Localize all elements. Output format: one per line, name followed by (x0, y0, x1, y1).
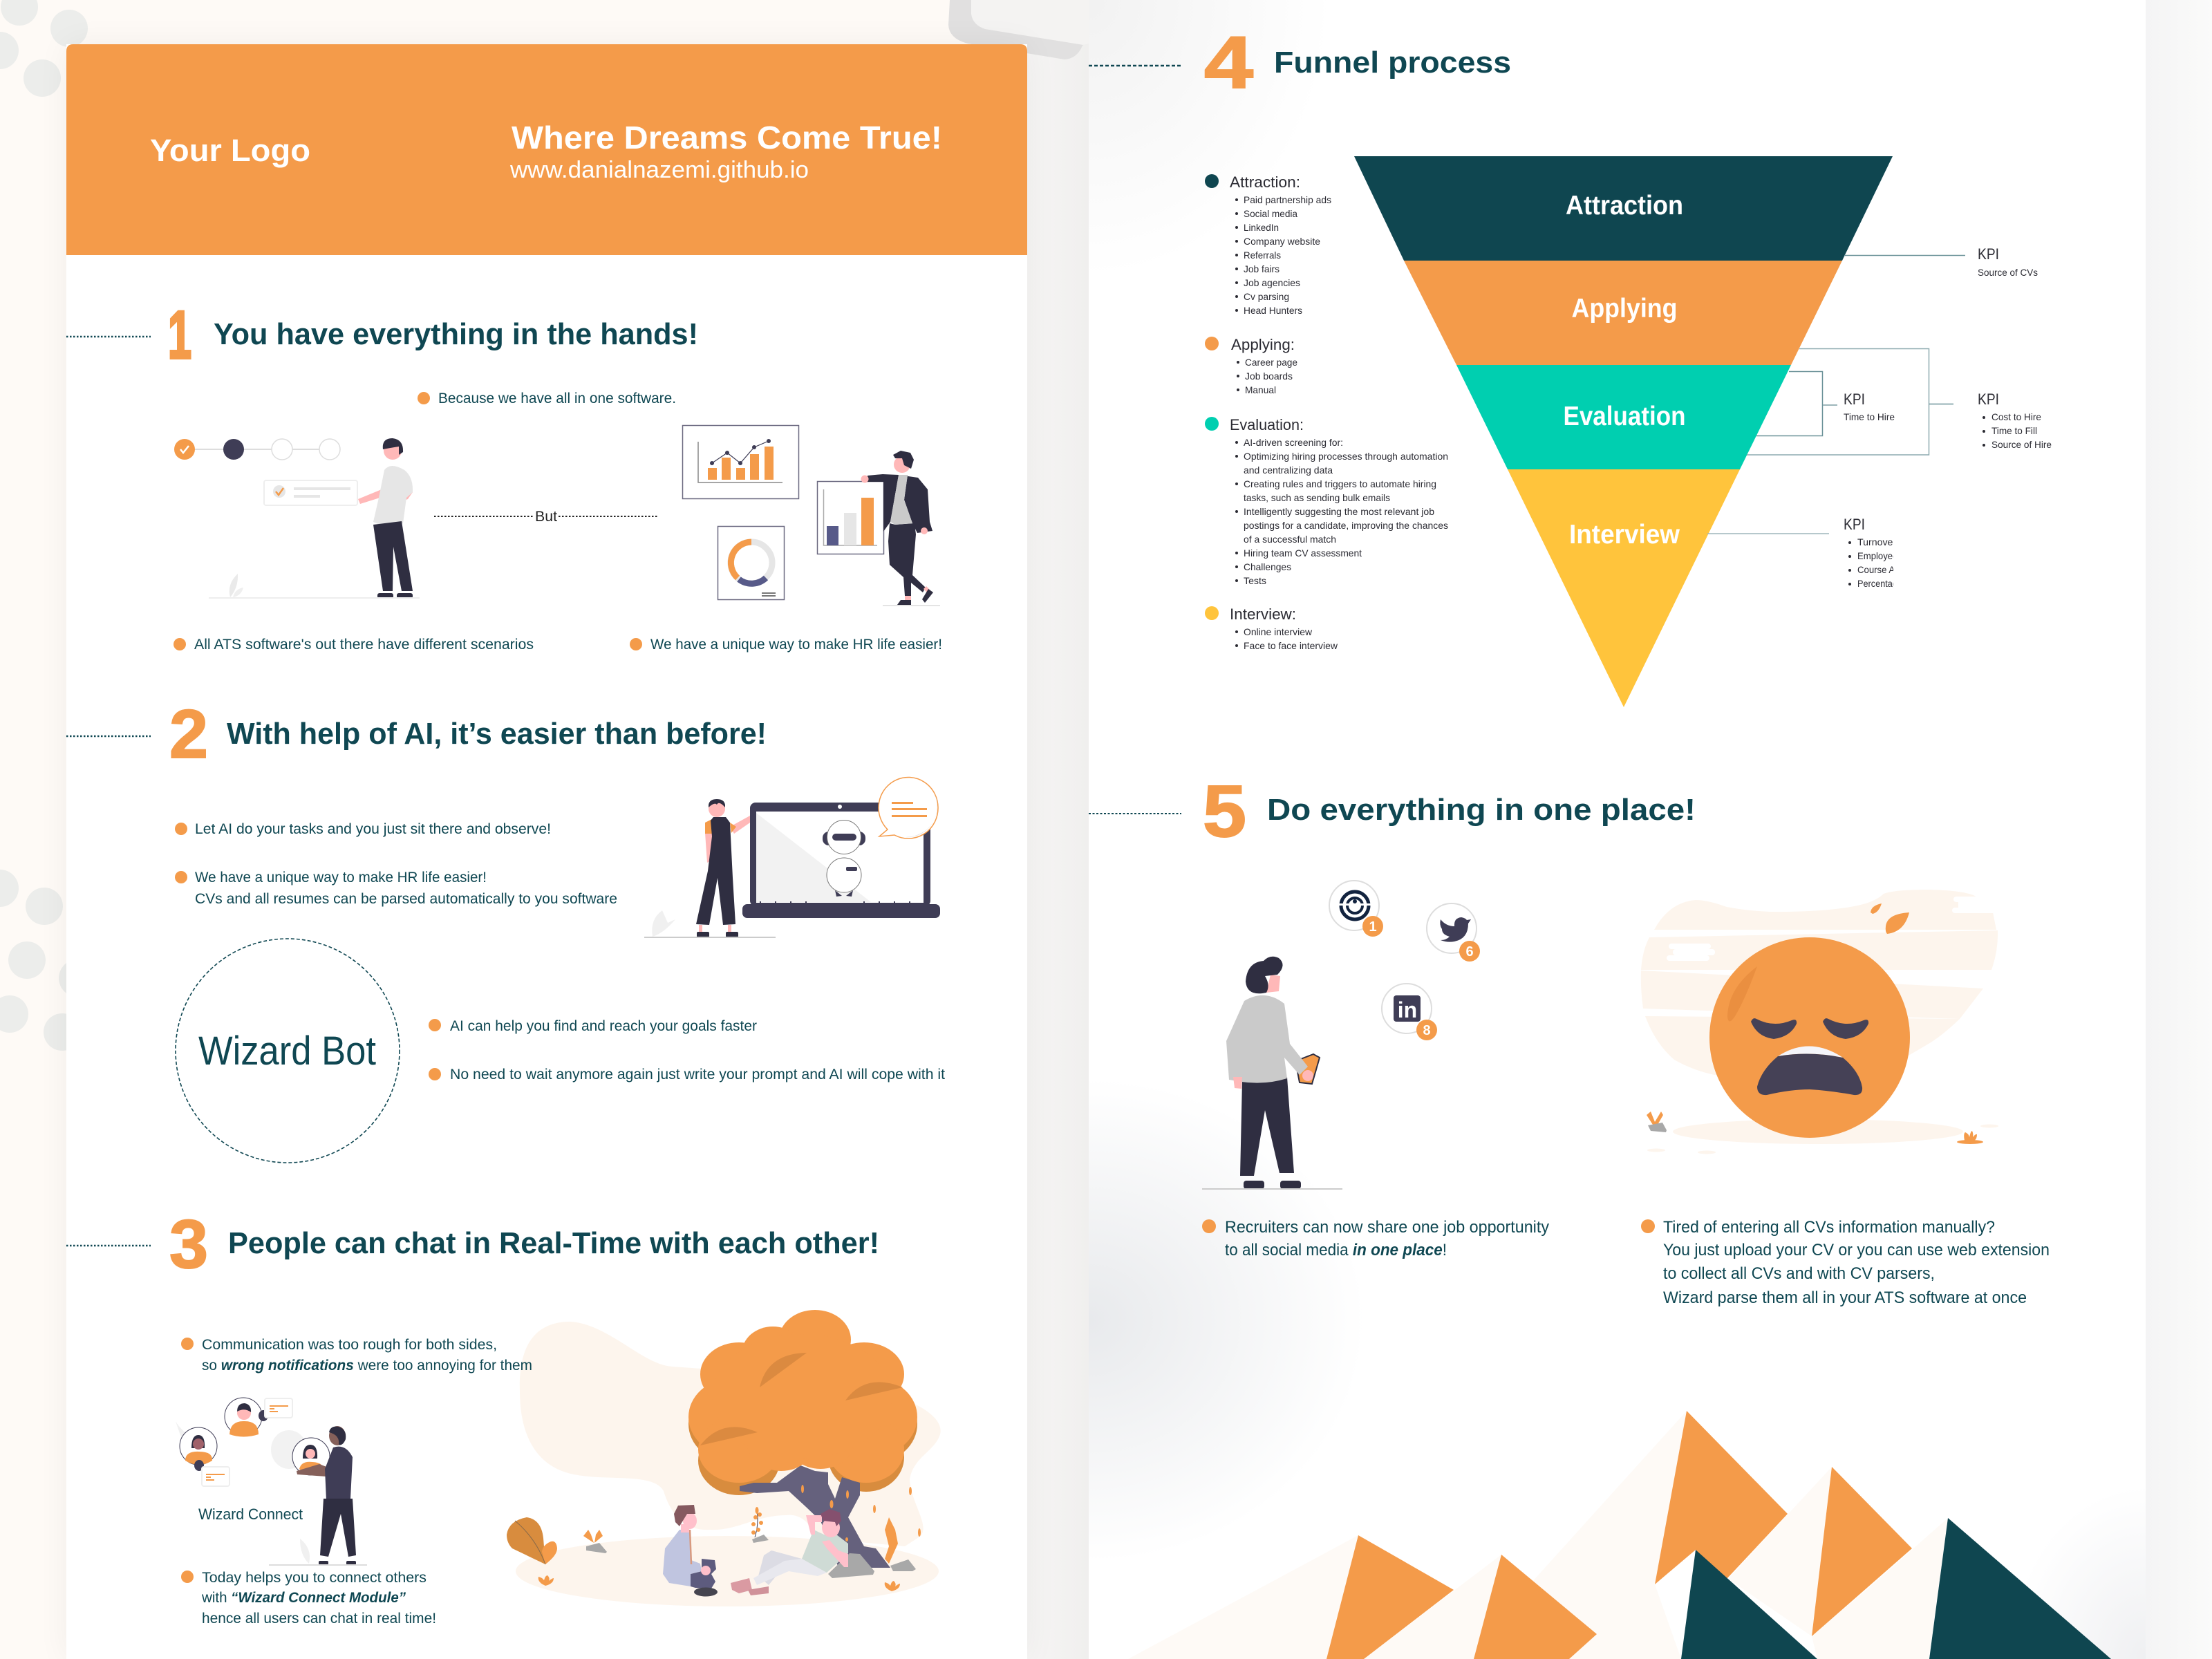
panel: right card (1089, 0, 2146, 1659)
section 5 heading: 5 (1203, 771, 1246, 852)
legend: evaluation: Challenges (1244, 561, 1291, 572)
KPI: interview metrics: Percentage Completed (1857, 578, 1947, 589)
funnel band: evaluation (1456, 365, 1791, 469)
legend: evaluation: Creating rules and triggers to automate hiring (1244, 478, 1436, 489)
illustration: person with progress steps (174, 438, 420, 599)
logo text: Your Logo (150, 133, 310, 168)
legend: evaluation: Hiring team CV assessment (1244, 547, 1362, 559)
big leaf (507, 1517, 557, 1564)
legend: funnel stages (1205, 174, 1448, 651)
icon: linkedin: 8 (1423, 1023, 1431, 1038)
falling leaves (801, 1485, 921, 1569)
bullet: tired of entering CVs (1641, 1218, 2050, 1307)
small tufts (538, 1575, 900, 1591)
section 5 heading (1089, 771, 1696, 852)
illustration: tired emoji (1641, 890, 1998, 1154)
left rock and sprout (583, 1530, 607, 1553)
bullet: let AI do tasks: Let AI do your tasks and you just sit there and observe! (195, 821, 551, 837)
illustration: people under a tree (507, 1310, 941, 1606)
rock behind person (828, 1553, 874, 1578)
bullet: parsing (175, 870, 617, 907)
funnel band: applying: Applying (1572, 294, 1677, 324)
legend: attraction (1205, 174, 1331, 316)
leaves (1647, 903, 1983, 1144)
section 5 heading: Do everything in one place! (1267, 793, 1696, 827)
KPI: interview metrics: Employee Satisfaction (1857, 550, 1947, 561)
funnel band: evaluation: Evaluation (1564, 402, 1685, 431)
funnel band: interview: Interview (1569, 520, 1680, 550)
legend: attraction: LinkedIn (1244, 222, 1279, 233)
bullet: find goals: AI can help you find and reach your goals faster (450, 1018, 757, 1034)
legend: evaluation: tasks, such as sending bulk emails (1244, 492, 1390, 503)
plant by the rock (885, 1517, 898, 1564)
funnel band: attraction (1354, 156, 1893, 261)
bullet: tired of entering CVs: You just upload your CV or you can use web extension (1663, 1241, 2050, 1259)
legend: interview: Face to face interview (1244, 640, 1338, 651)
bullet: tired of entering CVs: Wizard parse them all in your ATS software at once (1663, 1288, 2027, 1307)
legend: interview: Interview: (1230, 606, 1296, 623)
KPI: interview metrics: KPI (1844, 516, 1865, 533)
section 4 heading: 4 (1204, 21, 1253, 104)
KPI: cost to hire: Time to Fill (1991, 425, 2037, 436)
chart: bars and line (683, 426, 799, 499)
bullet: recruiters share: Recruiters can now share one job opportunity (1225, 1218, 1549, 1237)
KPI: source of CVs (1844, 245, 2038, 278)
bullet: ATS scenarios: All ATS software's out there have different scenarios (194, 637, 534, 653)
bullet: recruiters share: to all social media in one place! (1225, 1241, 1447, 1259)
legend: evaluation: of a successful match (1244, 534, 1336, 545)
KPI: cost to hire (1747, 348, 2052, 455)
bullet: communication: Communication was too rough for both sides, (202, 1337, 497, 1353)
legend: applying: Career page (1245, 357, 1297, 368)
legend: attraction: Job agencies (1244, 277, 1300, 288)
icon: wizard logo (1329, 881, 1383, 937)
bullet: today helps: Today helps you to connect others (202, 1570, 427, 1586)
icon: linkedin (1382, 984, 1437, 1040)
header url: www.danialnazemi.github.io (509, 157, 809, 183)
KPI: time to hire: Time to Hire (1844, 411, 1895, 422)
badge: Wizard Bot (176, 939, 400, 1163)
illustration: Wizard Connect person with avatars (176, 1398, 367, 1565)
icon: twitter: 6 (1465, 944, 1474, 959)
legend: attraction: Job fairs (1244, 263, 1280, 274)
tree foliage shadow (688, 1386, 917, 1495)
bullet: because: Because we have all in one software. (438, 391, 676, 406)
legend: applying: Manual (1245, 384, 1276, 395)
label: Wizard Connect: Wizard Connect (198, 1506, 303, 1523)
plant stem (751, 1507, 769, 1543)
section 2 heading: 2 (169, 695, 208, 772)
legend: applying: Job boards (1245, 371, 1293, 382)
KPI: cost to hire: Cost to Hire (1991, 411, 2041, 422)
emoji background bands (1641, 890, 1998, 1075)
KPI: cost to hire: Source of Hire (1991, 439, 2052, 450)
legend: attraction: Paid partnership ads (1244, 194, 1331, 205)
legend: evaluation: Evaluation: (1230, 416, 1304, 433)
KPI: time to hire: KPI (1844, 391, 1865, 408)
legend: applying (1205, 336, 1297, 395)
bullet: unique way: We have a unique way to make HR life easier! (650, 637, 942, 653)
person reclining (731, 1509, 848, 1595)
decoration: mountains (1128, 1411, 2111, 1659)
legend: attraction: Social media (1244, 208, 1297, 219)
person standing (861, 451, 940, 606)
chart: tall bars (817, 481, 883, 554)
funnel band: applying (1404, 261, 1842, 365)
legend: interview (1205, 606, 1338, 651)
KPI: source of CVs: Source of CVs (1978, 267, 2038, 278)
KPI: interview metrics: Course Attendance (1857, 564, 1935, 575)
emoji face (1709, 937, 1910, 1138)
icon: wizard logo: 1 (1369, 919, 1377, 935)
bullet: parsing: We have a unique way to make HR life easier! (195, 870, 487, 885)
funnel band: interview (1508, 469, 1740, 707)
section 3 heading: People can chat in Real-Time with each other! (228, 1226, 879, 1260)
legend: evaluation: postings for a candidate, improving the chances (1244, 520, 1448, 531)
section 3 heading (66, 1206, 879, 1282)
KPI: interview metrics: Turnover Rate (1857, 536, 1920, 547)
badge: Wizard Bot: Wizard Bot (198, 1029, 376, 1074)
legend: attraction: Head Hunters (1244, 305, 1302, 316)
legend: applying: Applying: (1231, 336, 1295, 353)
legend: attraction: Attraction: (1230, 174, 1300, 191)
tree foliage (688, 1310, 917, 1483)
section 2 heading: With help of AI, it’s easier than before! (227, 717, 767, 751)
icon: linkedin: in (1398, 997, 1417, 1022)
legend: evaluation: and centralizing data (1244, 465, 1333, 476)
section 1 heading: 1 (168, 297, 191, 373)
illustration: laptop robot and person (644, 777, 940, 937)
section 3 heading: 3 (169, 1206, 208, 1282)
bullet: no need to wait: No need to wait anymore again just write your prompt and AI will cope with it (450, 1067, 945, 1082)
KPI: cost to hire: KPI (1978, 391, 1999, 408)
bullet: parsing: CVs and all resumes can be parsed automatically to you software (195, 891, 617, 907)
bullet: tired of entering CVs: Tired of entering all CVs information manually? (1663, 1218, 1995, 1237)
section 4 heading: Funnel process (1274, 46, 1511, 79)
KPI: interview metrics (1707, 518, 1893, 588)
bullet: today helps: with “Wizard Connect Module” (201, 1590, 406, 1606)
avatar: top (225, 1398, 292, 1436)
right rock (890, 1559, 916, 1571)
avatar: left (180, 1427, 229, 1486)
tree trunk (740, 1465, 890, 1568)
legend: interview: Online interview (1244, 626, 1313, 637)
KPI: time to hire (1756, 372, 1895, 435)
legend: attraction: Company website (1244, 236, 1320, 247)
chart: donut (718, 527, 784, 600)
legend: evaluation: Tests (1244, 575, 1266, 586)
section 1 heading (66, 297, 698, 373)
foliage patches (700, 1353, 903, 1445)
panel: header banner (66, 44, 1027, 255)
illustration: person with charts (683, 426, 940, 606)
legend: attraction: Referrals (1244, 250, 1281, 261)
legend: evaluation: Intelligently suggesting the most relevant job (1244, 506, 1434, 517)
panel: left card (66, 44, 1027, 1659)
legend: evaluation: AI-driven screening for: (1244, 437, 1343, 448)
header tagline: Where Dreams Come True! (512, 120, 942, 156)
legend: evaluation (1205, 416, 1448, 586)
person sitting (663, 1505, 718, 1597)
bullet: today helps: hence all users can chat in real time! (202, 1611, 436, 1627)
illustration: person with social icons (1202, 881, 1480, 1189)
bullet: tired of entering CVs: to collect all CVs and with CV parsers, (1663, 1264, 1935, 1283)
bullet: today helps (181, 1570, 436, 1627)
connector: But: But (535, 509, 557, 525)
legend: evaluation: Optimizing hiring processes through automation (1244, 451, 1448, 462)
bullet: communication: so wrong notifications were too annoying for them (202, 1358, 532, 1374)
icon: twitter (1427, 903, 1480, 962)
section 2 heading (66, 695, 767, 772)
funnel band: attraction: Attraction (1566, 191, 1683, 221)
KPI: source of CVs: KPI (1978, 245, 1999, 263)
avatar: held (292, 1438, 330, 1475)
section 1 heading: You have everything in the hands! (214, 317, 698, 351)
bullet: recruiters share (1202, 1218, 1549, 1259)
section 4 heading (1089, 21, 1511, 104)
bullet: communication (181, 1337, 532, 1374)
legend: attraction: Cv parsing (1244, 291, 1289, 302)
chart: funnel (1354, 156, 1893, 707)
